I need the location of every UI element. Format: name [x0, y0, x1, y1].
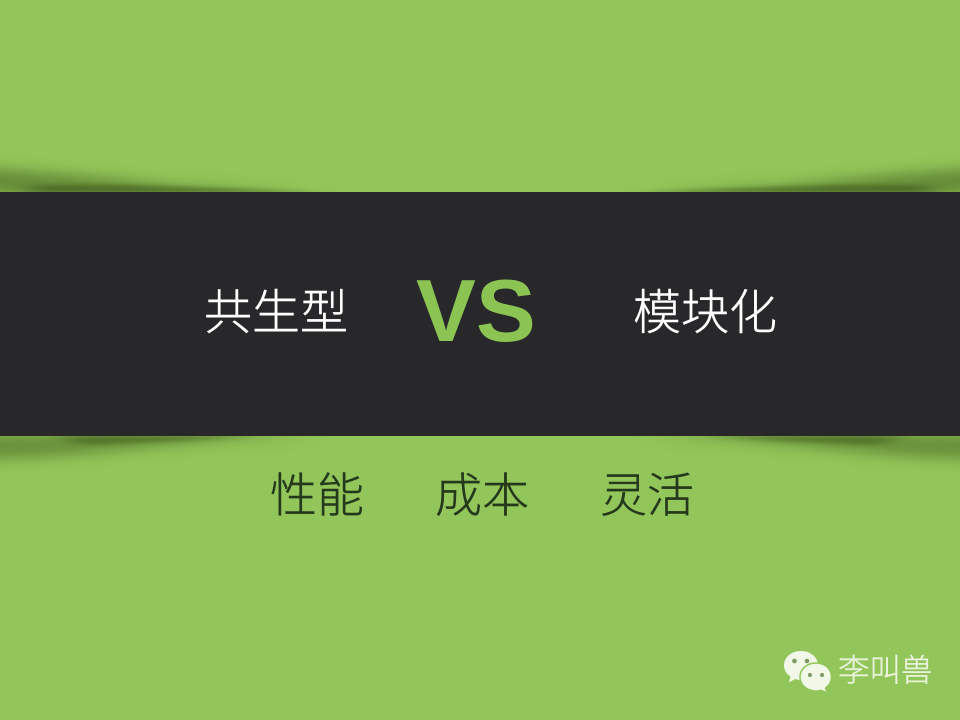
keyword: cost: 成本 [435, 469, 529, 522]
left heading: 共生型 [204, 287, 348, 340]
VS label: VS [416, 261, 536, 360]
icon: wechat logo [784, 651, 831, 692]
right heading: 模块化 [633, 287, 777, 340]
keyword: flexibility: 灵活 [600, 469, 694, 522]
dark band [0, 192, 960, 436]
keyword: performance: 性能 [270, 469, 364, 522]
watermark name: 李叫兽 [838, 652, 933, 688]
